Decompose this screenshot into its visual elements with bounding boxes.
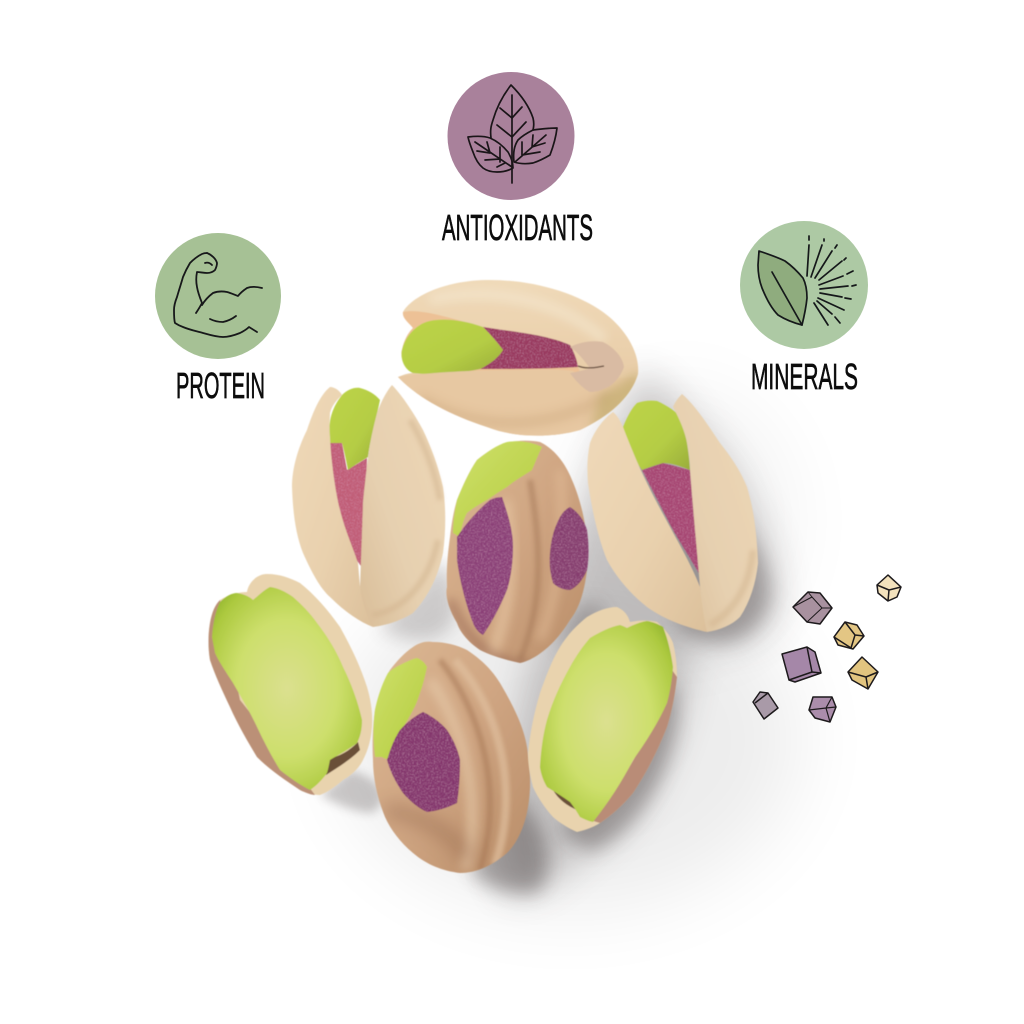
shell rim	[208, 574, 372, 795]
pistachio: lower right, open half with green kernel	[528, 607, 677, 832]
kernel: green	[623, 401, 690, 470]
badge: minerals	[740, 221, 868, 397]
skin stripes	[385, 660, 506, 870]
right shell half	[673, 394, 758, 632]
hull seam	[578, 366, 604, 368]
icon: three leaves	[468, 85, 557, 183]
hull tip	[570, 341, 624, 392]
icon: flexed bicep	[174, 253, 262, 337]
label: ANTIOXIDANTS: ANTIOXIDANTS	[442, 207, 593, 248]
dark gap	[326, 742, 360, 775]
mineral cubes	[753, 575, 901, 722]
badge circle	[155, 233, 281, 359]
kernel: pink skin	[642, 463, 703, 580]
icon: leaf with rays	[758, 236, 856, 325]
pistachio: middle, purple-skinned kernel	[446, 441, 588, 665]
pistachio: upper left, upright split shell	[292, 385, 445, 627]
cube: large purple	[782, 647, 821, 682]
cube: gold upper	[834, 622, 864, 649]
skin ridges	[450, 470, 562, 665]
kernel: green	[329, 388, 380, 470]
dark gap	[552, 788, 577, 810]
pistachio: lower left, open half with green kernel	[208, 574, 372, 795]
shell body	[398, 280, 638, 436]
label: MINERALS: MINERALS	[751, 356, 858, 397]
right shell half	[360, 385, 445, 627]
spot: purple left	[457, 497, 513, 635]
pistachio: upper right, upright split shell	[587, 394, 758, 632]
skin body	[373, 642, 530, 873]
left shell half	[292, 387, 373, 627]
kernel: pink skin	[480, 327, 578, 369]
skin edge	[590, 670, 677, 823]
cube: pale gold, top right	[877, 575, 901, 601]
badge circle	[740, 221, 868, 349]
badge: protein	[155, 233, 281, 406]
cube: grey purple	[753, 692, 778, 719]
shell shading	[710, 550, 753, 625]
shell shading	[372, 420, 440, 615]
left shell half	[587, 412, 707, 632]
skin edge	[208, 600, 315, 795]
kernel: green patch	[374, 658, 427, 759]
kernel: pink skin	[330, 443, 367, 570]
spot: purple	[387, 712, 460, 812]
kernel: green flesh	[540, 621, 673, 822]
cast shadows	[320, 370, 800, 910]
label: PROTEIN: PROTEIN	[176, 365, 265, 406]
kernel: green flesh	[212, 587, 362, 790]
pistachio: bottom centre, skin with purple patch	[373, 642, 530, 873]
cube: gold lower	[848, 657, 878, 689]
kernel: green patch	[453, 441, 542, 537]
spot: purple right	[550, 507, 588, 590]
infographic: pistachio nutrients	[155, 72, 902, 920]
lower shell lip	[398, 369, 636, 436]
cavity	[401, 311, 580, 373]
cube: violet	[809, 697, 836, 722]
shell rim	[528, 607, 677, 832]
badge circle	[448, 72, 574, 200]
pistachio: top, lying on its side	[398, 280, 640, 436]
kernel: green	[402, 320, 503, 374]
badge: antioxidants	[442, 72, 593, 248]
shell shading	[420, 294, 640, 430]
skin body	[446, 441, 588, 663]
cube: mauve	[793, 592, 832, 624]
